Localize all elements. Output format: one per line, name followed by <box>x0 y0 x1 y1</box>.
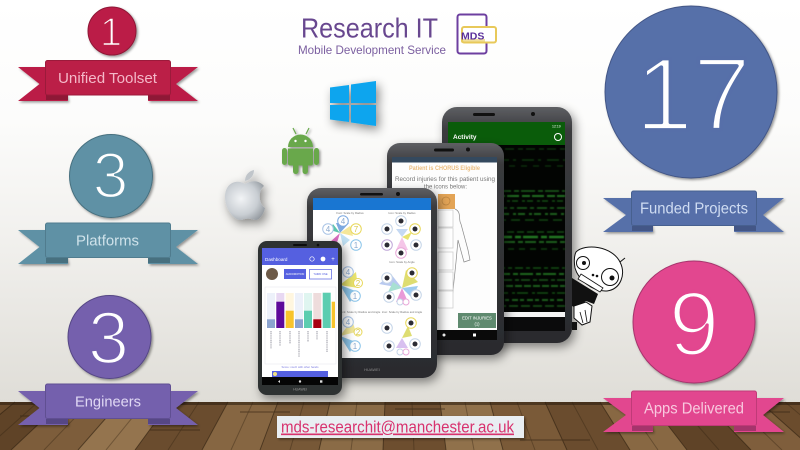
phone: radial charts screen: 1 <box>353 342 358 351</box>
ribbon: platforms <box>18 223 198 264</box>
app bar title: Dashboard <box>265 257 288 262</box>
contact email: mds-researchit@manchester.ac.uk <box>281 418 515 436</box>
phone: radial charts screen: 4 <box>326 225 331 234</box>
text: record injuries instruction: Record injuries for this patient using <box>395 176 495 183</box>
stat circle: 3 platforms <box>70 134 152 218</box>
stat circle: 1 <box>88 7 136 55</box>
icon: Android logo <box>282 128 319 174</box>
phone: radial charts screen: 2 <box>356 328 361 337</box>
ribbon: engineers: Engineers <box>75 394 141 410</box>
icon: MDS logo: MDS <box>461 30 484 42</box>
button: edit injuries <box>458 313 496 328</box>
icon: Windows logo <box>330 81 376 126</box>
stat circle: 9: 9 <box>669 274 719 375</box>
phone: patient injuries screen <box>387 143 504 355</box>
wooden floor <box>0 402 800 450</box>
ribbon: unified toolset <box>18 60 198 101</box>
phone: radial charts screen: 1 <box>354 241 359 250</box>
phone: dashboard screen <box>258 241 342 395</box>
buttons <box>284 269 332 279</box>
chart labels: Font: Scale by Radius <box>336 211 364 215</box>
radial number and icon badges <box>323 216 421 355</box>
phone: radial charts screen: 4 <box>346 268 351 277</box>
phone: activity screen: Activity <box>453 134 477 141</box>
icon: MDS logo <box>458 14 496 54</box>
panel: engineers <box>18 296 198 425</box>
ribbon: apps delivered: Apps Delivered <box>644 400 744 418</box>
phone: radial charts screen: 4 <box>346 318 351 327</box>
slider <box>272 365 328 377</box>
ribbon: funded projects <box>603 191 784 232</box>
icon: Apple logo <box>225 170 265 220</box>
stat circle: 1: 1 <box>100 10 122 54</box>
ribbon: funded projects: Funded Projects <box>640 200 748 218</box>
ribbon: apps delivered <box>603 391 784 432</box>
phone: radial charts screen: 1 <box>353 292 358 301</box>
button: edit injuries: EDIT INJURIES <box>462 316 492 320</box>
buttons: AUDIOMOTION <box>286 272 304 276</box>
phone: activity screen <box>442 107 572 343</box>
phone: radial charts screen: 4 <box>341 217 346 226</box>
chart labels: Icon: Scale by Radius <box>388 211 416 215</box>
stat circle: 3 engineers <box>68 296 151 380</box>
ribbon: engineers <box>18 384 198 425</box>
stat circle: 3 platforms: 3 <box>93 140 128 212</box>
ribbon: unified toolset: Unified Toolset <box>58 70 158 87</box>
phone: radial charts screen <box>307 188 437 378</box>
radial wedges <box>330 223 418 352</box>
panel: apps delivered <box>603 261 784 432</box>
panel: funded projects <box>603 6 784 232</box>
phone: activity screen: 12:19 <box>552 124 561 128</box>
avatar <box>266 268 278 280</box>
slider: Score: much with other hands <box>281 365 319 369</box>
stat circle: 17: 17 <box>635 37 751 153</box>
stat circle: 9 <box>633 261 755 383</box>
phone: radial charts screen: 7 <box>354 225 359 234</box>
text: patient eligibility: Patient is CHORUS Eligible <box>409 165 480 172</box>
stat circle: 3 engineers: 3 <box>88 296 129 380</box>
panel: unified toolset <box>18 7 198 101</box>
subheading: Mobile Development Service: Mobile Development Service <box>298 43 446 57</box>
buttons: THIRD ONE <box>313 272 328 276</box>
panel: platforms <box>18 134 198 264</box>
icon: peeking zombie cartoon <box>572 247 625 330</box>
chart labels <box>336 211 423 314</box>
chart labels: Icon: Scale by Radius and Angle <box>382 310 423 314</box>
chart labels: Font: Scale by Radius and Angle <box>340 310 381 314</box>
phone: dashboard screen: + <box>331 257 335 263</box>
phone: radial charts screen: HUAWEI <box>364 367 380 372</box>
stat circle: 17 <box>605 6 777 178</box>
chart labels: Icon: Scale by Angle <box>389 260 415 264</box>
body diagram <box>438 194 470 308</box>
phone: radial charts screen: 2 <box>356 279 361 288</box>
ribbon: platforms: Platforms <box>76 232 139 250</box>
text: record injuries instruction: the icons below: <box>424 184 467 190</box>
heading: Research IT: Research IT <box>301 12 438 44</box>
phone: dashboard screen: HUAWEI <box>293 388 307 392</box>
button: edit injuries: (1) <box>474 322 480 326</box>
bar chart <box>265 287 336 364</box>
